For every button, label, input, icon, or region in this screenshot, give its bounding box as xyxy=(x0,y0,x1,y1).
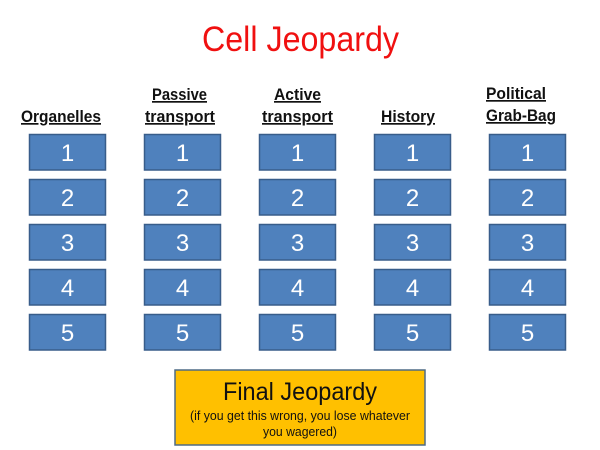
button 1: 1 xyxy=(291,140,304,167)
button 1 xyxy=(260,134,336,170)
button 5 xyxy=(374,314,450,350)
button 4: 4 xyxy=(521,275,534,302)
heading: Passive transport: Passive xyxy=(152,85,207,104)
button 5: 5 xyxy=(521,320,534,347)
heading: Active transport: transport xyxy=(262,107,333,126)
button 3: 3 xyxy=(521,230,534,257)
button 5 xyxy=(260,314,336,350)
button 3: 3 xyxy=(291,230,304,257)
button 2 xyxy=(144,180,220,215)
button 2 xyxy=(260,180,336,215)
button 5 xyxy=(490,314,566,350)
button 2: 2 xyxy=(61,185,74,212)
button 2: 2 xyxy=(406,185,419,212)
button 3: 3 xyxy=(406,230,419,257)
button 3 xyxy=(490,224,566,260)
heading: Passive transport xyxy=(145,85,215,126)
button 1 xyxy=(374,134,450,170)
heading: Political Grab-Bag: Grab-Bag xyxy=(486,106,556,125)
button 5: 5 xyxy=(291,320,304,347)
column: Political Grab-Bag xyxy=(486,84,566,350)
button 2: 2 xyxy=(521,185,534,212)
heading: Passive transport: transport xyxy=(145,107,215,126)
button 4: 4 xyxy=(291,275,304,302)
button 2 xyxy=(30,180,106,215)
button 3: 3 xyxy=(176,230,189,257)
button 4 xyxy=(490,270,566,305)
button 5: 5 xyxy=(176,320,189,347)
button 3 xyxy=(260,224,336,260)
column: Active transport xyxy=(260,85,336,350)
button 4: 4 xyxy=(176,275,189,302)
final subtext xyxy=(190,408,411,439)
button 2: 2 xyxy=(176,185,189,212)
panel: Final Jeopardy xyxy=(175,370,425,445)
column: Passive transport xyxy=(144,85,220,350)
heading: History: History xyxy=(381,107,435,126)
heading: Political Grab-Bag xyxy=(486,84,556,125)
button 1: 1 xyxy=(406,140,419,167)
button 1: 1 xyxy=(61,140,74,167)
final subtext: you wagered) xyxy=(263,424,337,439)
button 1: 1 xyxy=(521,140,534,167)
button 3 xyxy=(144,224,220,260)
button 5 xyxy=(30,314,106,350)
button 4: 4 xyxy=(406,275,419,302)
button 1 xyxy=(490,134,566,170)
button 1: 1 xyxy=(176,140,189,167)
button 4 xyxy=(374,270,450,305)
button 5: 5 xyxy=(61,320,74,347)
button 2 xyxy=(490,180,566,215)
button 4: 4 xyxy=(61,275,74,302)
column: History xyxy=(374,107,450,350)
button 4 xyxy=(260,270,336,305)
final heading: Final Jeopardy xyxy=(223,378,377,406)
button 1 xyxy=(144,134,220,170)
button 3: 3 xyxy=(61,230,74,257)
button 1 xyxy=(30,134,106,170)
button 2 xyxy=(374,180,450,215)
column: Organelles xyxy=(21,107,106,350)
heading: Active transport: Active xyxy=(274,85,321,104)
button 3 xyxy=(374,224,450,260)
button 4 xyxy=(144,270,220,305)
button 3 xyxy=(30,224,106,260)
button 5 xyxy=(144,314,220,350)
title: Cell Jeopardy xyxy=(202,20,399,59)
heading: Organelles: Organelles xyxy=(21,107,101,126)
heading: Active transport xyxy=(262,85,333,126)
button 4 xyxy=(30,270,106,305)
button 2: 2 xyxy=(291,185,304,212)
heading: Political Grab-Bag: Political xyxy=(486,84,546,103)
final subtext: (if you get this wrong, you lose whatever xyxy=(190,408,411,423)
button 5: 5 xyxy=(406,320,419,347)
